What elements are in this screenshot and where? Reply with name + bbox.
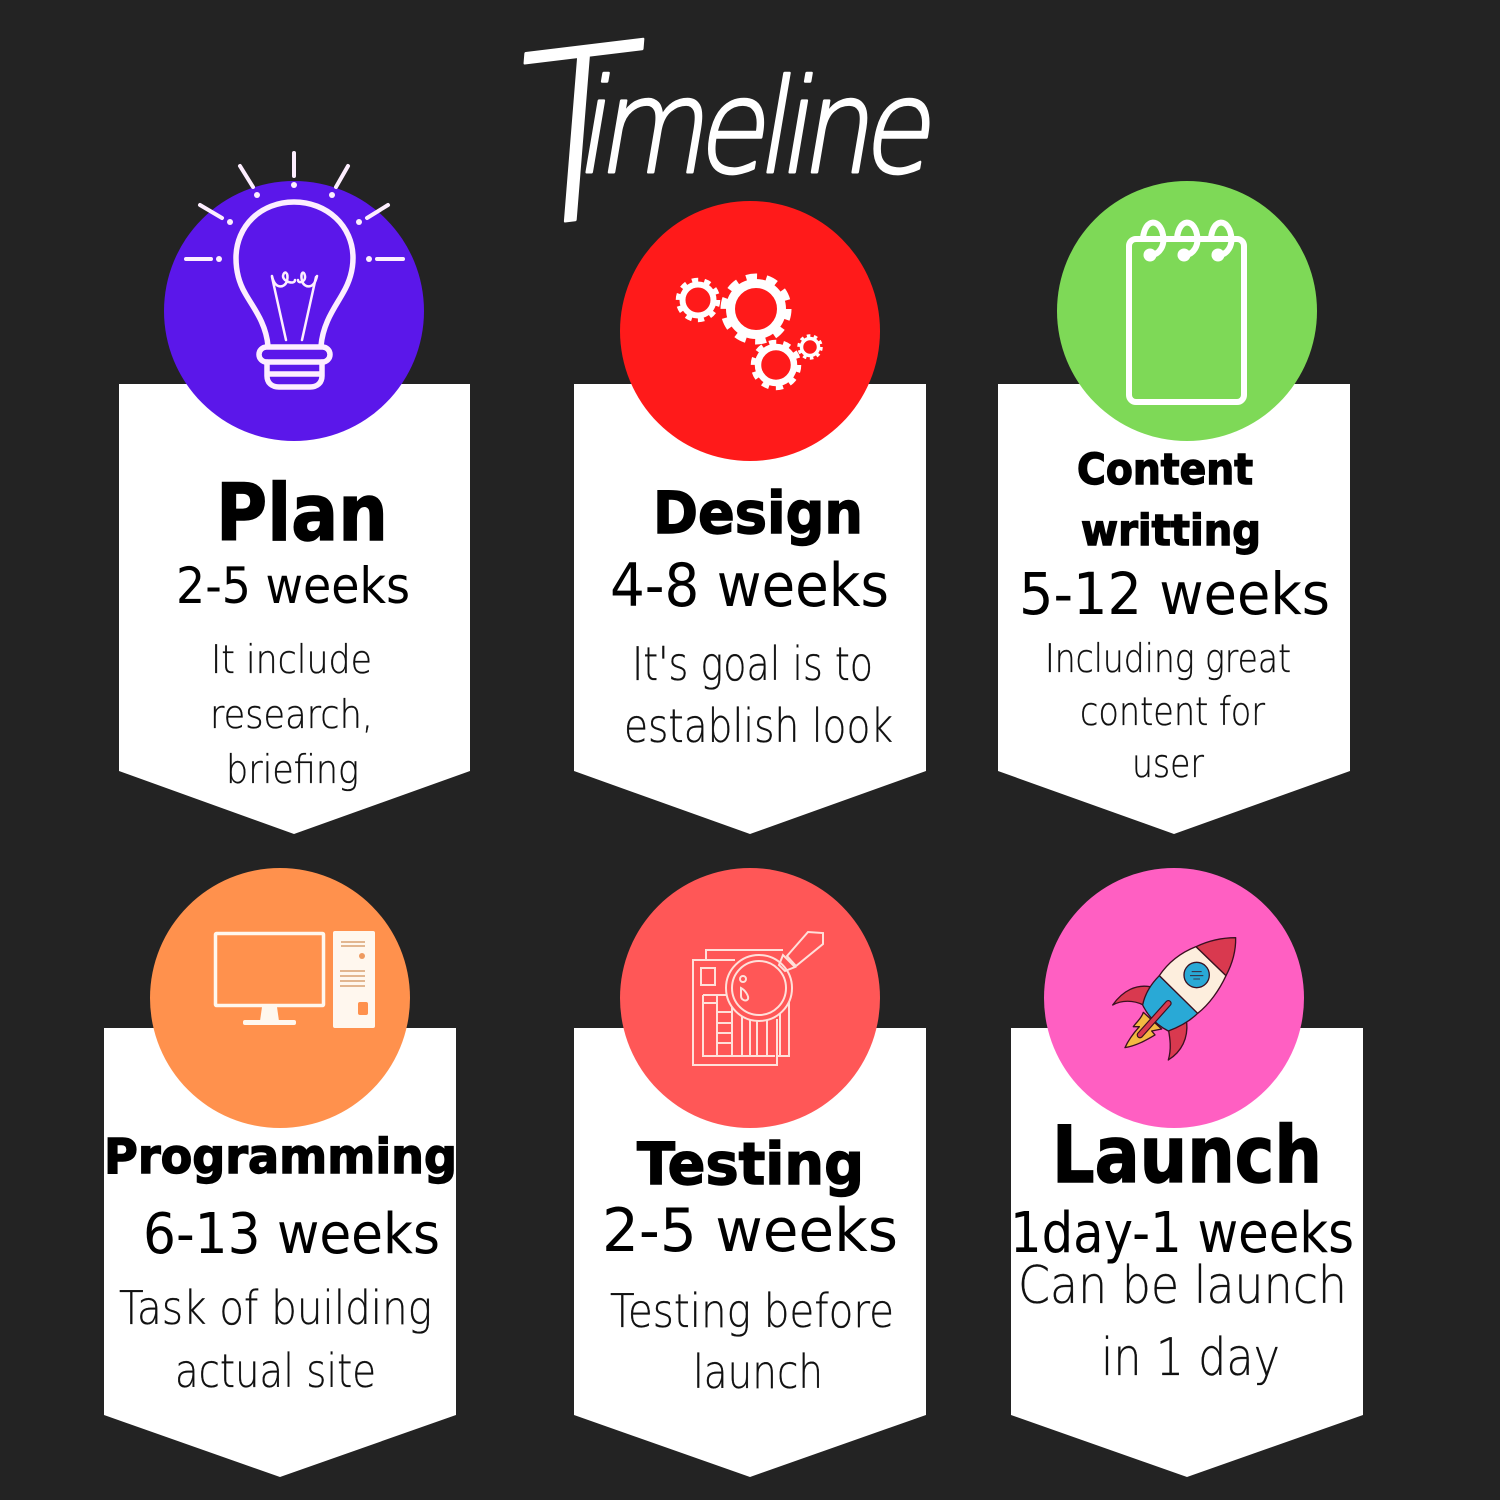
duration: design: 4-8 weeks bbox=[610, 551, 889, 621]
icon: magnifier over document bbox=[693, 932, 823, 1065]
description: launch bbox=[1018, 1256, 1347, 1388]
panel: design bbox=[574, 201, 926, 834]
circle: testing bbox=[620, 868, 880, 1128]
icon: light bulb bbox=[186, 153, 403, 387]
icon: desktop computer bbox=[216, 931, 375, 1028]
description: testing: Testing before bbox=[610, 1284, 894, 1338]
heading: programming: Programming bbox=[104, 1129, 457, 1185]
panel: testing bbox=[574, 868, 926, 1477]
description: testing: launch bbox=[693, 1345, 823, 1399]
card: testing bbox=[574, 1028, 926, 1477]
panel: programming bbox=[104, 868, 457, 1477]
card: design bbox=[574, 384, 926, 834]
heading: content writing: writting bbox=[1081, 506, 1261, 556]
card: launch bbox=[1011, 1028, 1363, 1477]
duration: content writing: 5-12 weeks bbox=[1019, 560, 1330, 628]
description: design bbox=[624, 637, 893, 753]
title: T bbox=[478, 0, 676, 284]
icon: notepad bbox=[1129, 223, 1244, 402]
description: plan: research, bbox=[210, 693, 373, 738]
panel: content writing bbox=[998, 181, 1350, 834]
icon: gears bbox=[679, 278, 821, 387]
description: launch: Can be launch bbox=[1018, 1256, 1347, 1316]
description: content writing: user bbox=[1132, 742, 1204, 787]
description: content writing: Including great bbox=[1045, 637, 1291, 682]
title: imeline bbox=[569, 51, 942, 203]
circle: programming bbox=[150, 868, 410, 1128]
panel: launch bbox=[1010, 868, 1363, 1477]
circle: plan bbox=[164, 181, 424, 441]
heading: design: Design bbox=[653, 479, 863, 547]
card: plan bbox=[119, 384, 470, 834]
description: content writing bbox=[1045, 637, 1291, 787]
circle: content writing bbox=[1057, 181, 1317, 441]
description: launch: in 1 day bbox=[1101, 1328, 1280, 1388]
description: plan: briefing bbox=[226, 748, 359, 793]
title bbox=[478, 0, 952, 284]
heading: launch: Launch bbox=[1052, 1111, 1322, 1201]
card: content writing bbox=[998, 384, 1350, 834]
duration: testing: 2-5 weeks bbox=[602, 1196, 898, 1266]
duration: launch: 1day-1 weeks bbox=[1010, 1201, 1354, 1266]
description: design: establish look bbox=[624, 699, 893, 753]
heading: content writing bbox=[1077, 445, 1261, 556]
card: programming bbox=[104, 1028, 456, 1477]
circle: launch bbox=[1044, 868, 1304, 1128]
heading: content writing: Content bbox=[1077, 445, 1253, 495]
description: testing bbox=[610, 1284, 894, 1399]
description: plan: It include bbox=[211, 638, 372, 683]
description: plan bbox=[210, 638, 373, 793]
icon: rocket bbox=[1113, 938, 1236, 1060]
duration: programming: 6-13 weeks bbox=[143, 1202, 440, 1267]
panel: plan bbox=[119, 153, 470, 834]
duration: plan: 2-5 weeks bbox=[176, 557, 410, 615]
description: design: It's goal is to bbox=[632, 637, 873, 691]
heading: plan: Plan bbox=[216, 469, 388, 559]
circle: design bbox=[620, 201, 880, 461]
heading: testing: Testing bbox=[637, 1130, 864, 1198]
description: programming: Task of building bbox=[119, 1281, 432, 1335]
description: content writing: content for bbox=[1080, 690, 1265, 735]
description: programming: actual site bbox=[175, 1344, 376, 1398]
description: programming bbox=[119, 1281, 432, 1398]
